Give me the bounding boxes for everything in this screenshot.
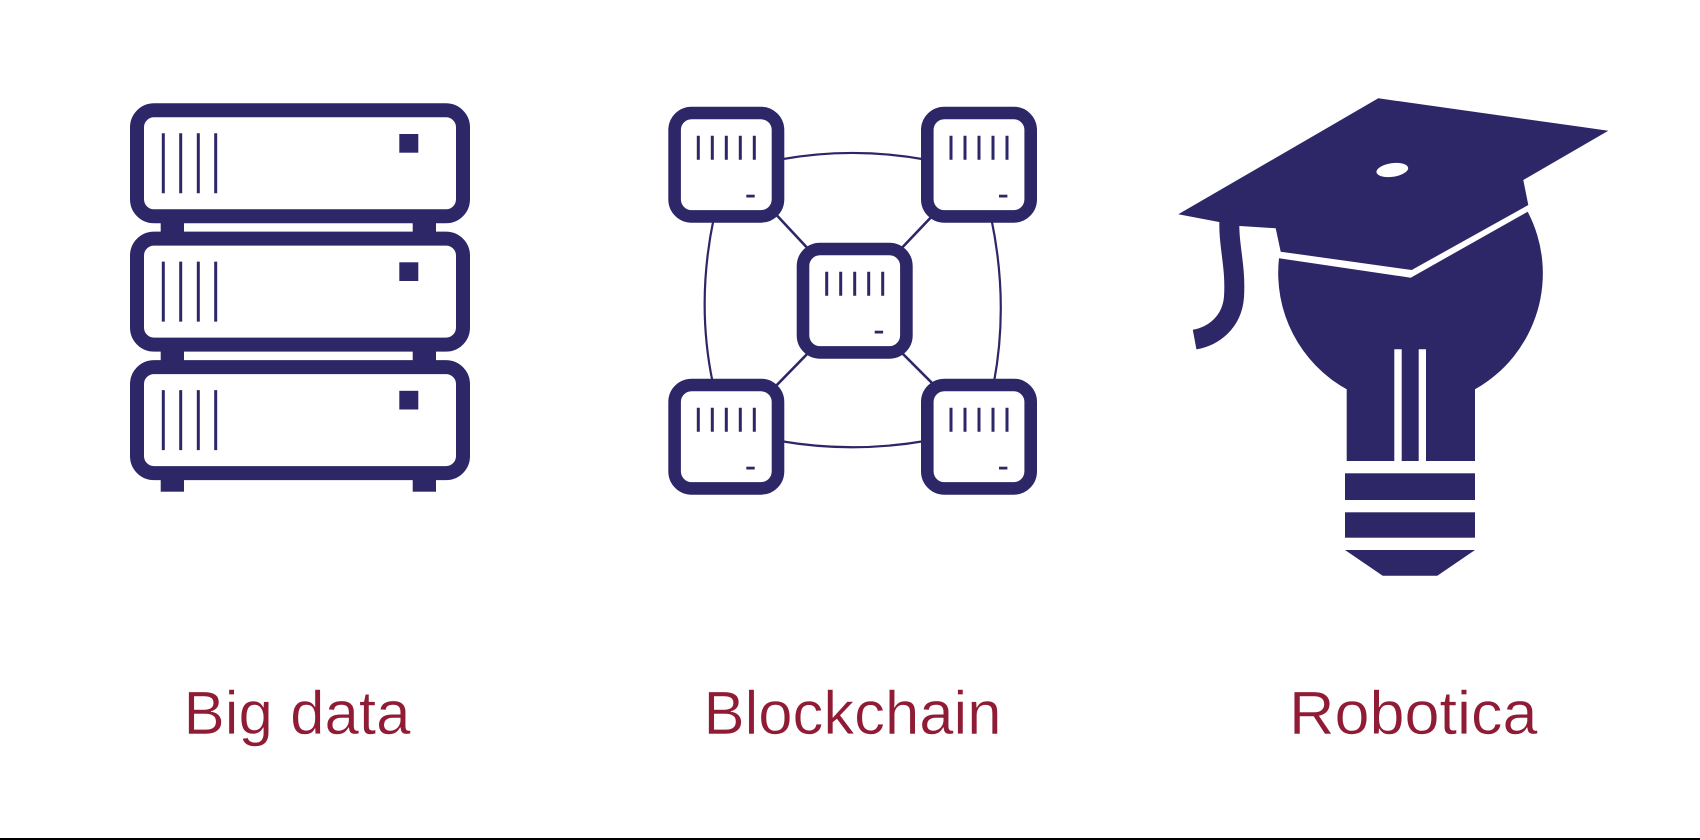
icon: graduation cap on light bulb	[1178, 98, 1608, 576]
label: Robotica: Robotica	[1289, 679, 1538, 747]
label: Blockchain: Blockchain	[704, 679, 1002, 747]
icon: blockchain network	[675, 113, 1031, 488]
icon: big data server stack	[137, 110, 463, 492]
label: Big data: Big data	[184, 679, 411, 747]
bottom border line	[0, 838, 1700, 840]
